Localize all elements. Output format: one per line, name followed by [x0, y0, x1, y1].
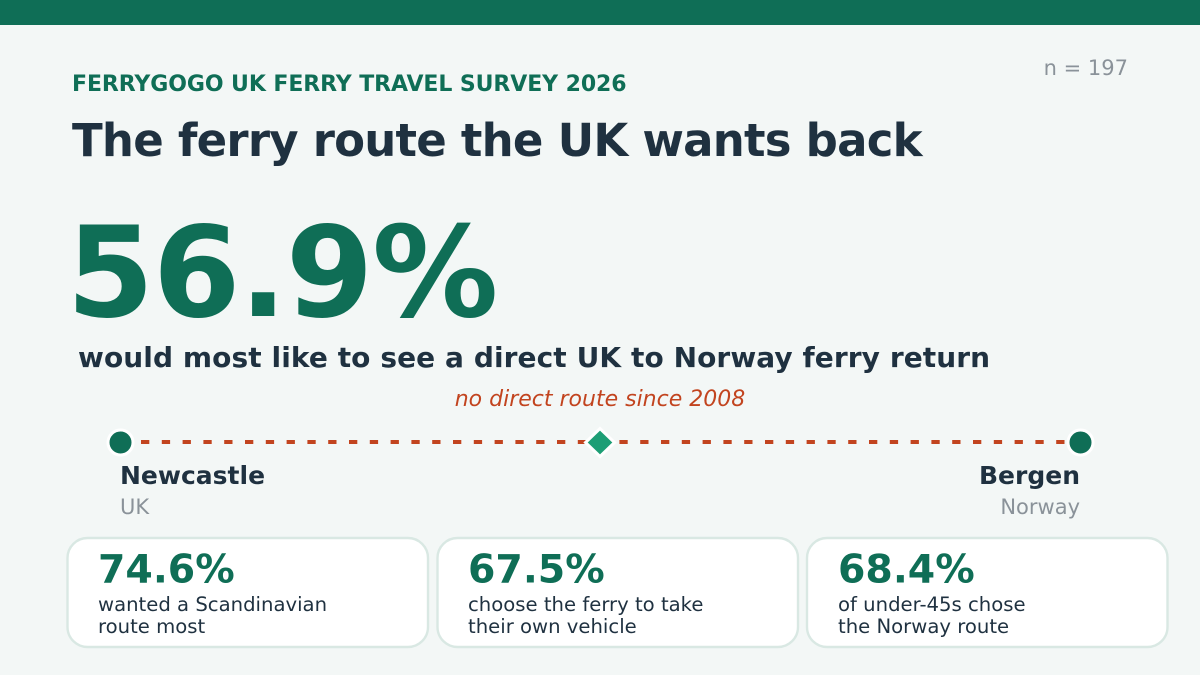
- panel: Scandinavian route stat: route most: [98, 615, 206, 638]
- panel: own vehicle stat: 67.5%: [468, 546, 605, 592]
- panel: Scandinavian route stat: [68, 538, 428, 647]
- hero description: would most like to see a direct UK to Norway ferry return: [78, 341, 990, 374]
- route dashed line: [141, 440, 1068, 444]
- icon: Newcastle marker: [108, 430, 133, 455]
- top banner: [0, 0, 1200, 25]
- hero statistic: 56.9%: [66, 199, 497, 346]
- route diagram: [108, 428, 1093, 456]
- origin label: Newcastle: [120, 461, 265, 490]
- survey label: FERRYGOGO UK FERRY TRAVEL SURVEY 2026: [72, 72, 627, 97]
- title: The ferry route the UK wants back: [72, 114, 924, 167]
- panel: under-45s stat: the Norway route: [838, 615, 1009, 638]
- icon: Bergen marker: [1068, 430, 1093, 455]
- panel: own vehicle stat: their own vehicle: [468, 615, 637, 638]
- sample size: n = 197: [1044, 56, 1128, 80]
- panel: own vehicle stat: [438, 538, 798, 647]
- panel: under-45s stat: of under-45s chose: [838, 593, 1026, 616]
- destination label: Bergen: [979, 461, 1080, 490]
- panel: Scandinavian route stat: wanted a Scandinavian: [98, 593, 327, 616]
- origin label: [120, 461, 265, 519]
- panel: under-45s stat: 68.4%: [838, 546, 975, 592]
- panel: under-45s stat: [807, 538, 1168, 647]
- destination label: Norway: [1000, 495, 1080, 519]
- route note: no direct route since 2008: [455, 387, 745, 412]
- origin label: UK: [120, 495, 150, 519]
- icon: midpoint diamond: [586, 428, 614, 456]
- destination label: [979, 461, 1080, 519]
- panel: Scandinavian route stat: 74.6%: [98, 546, 235, 592]
- panel: own vehicle stat: choose the ferry to take: [468, 593, 703, 616]
